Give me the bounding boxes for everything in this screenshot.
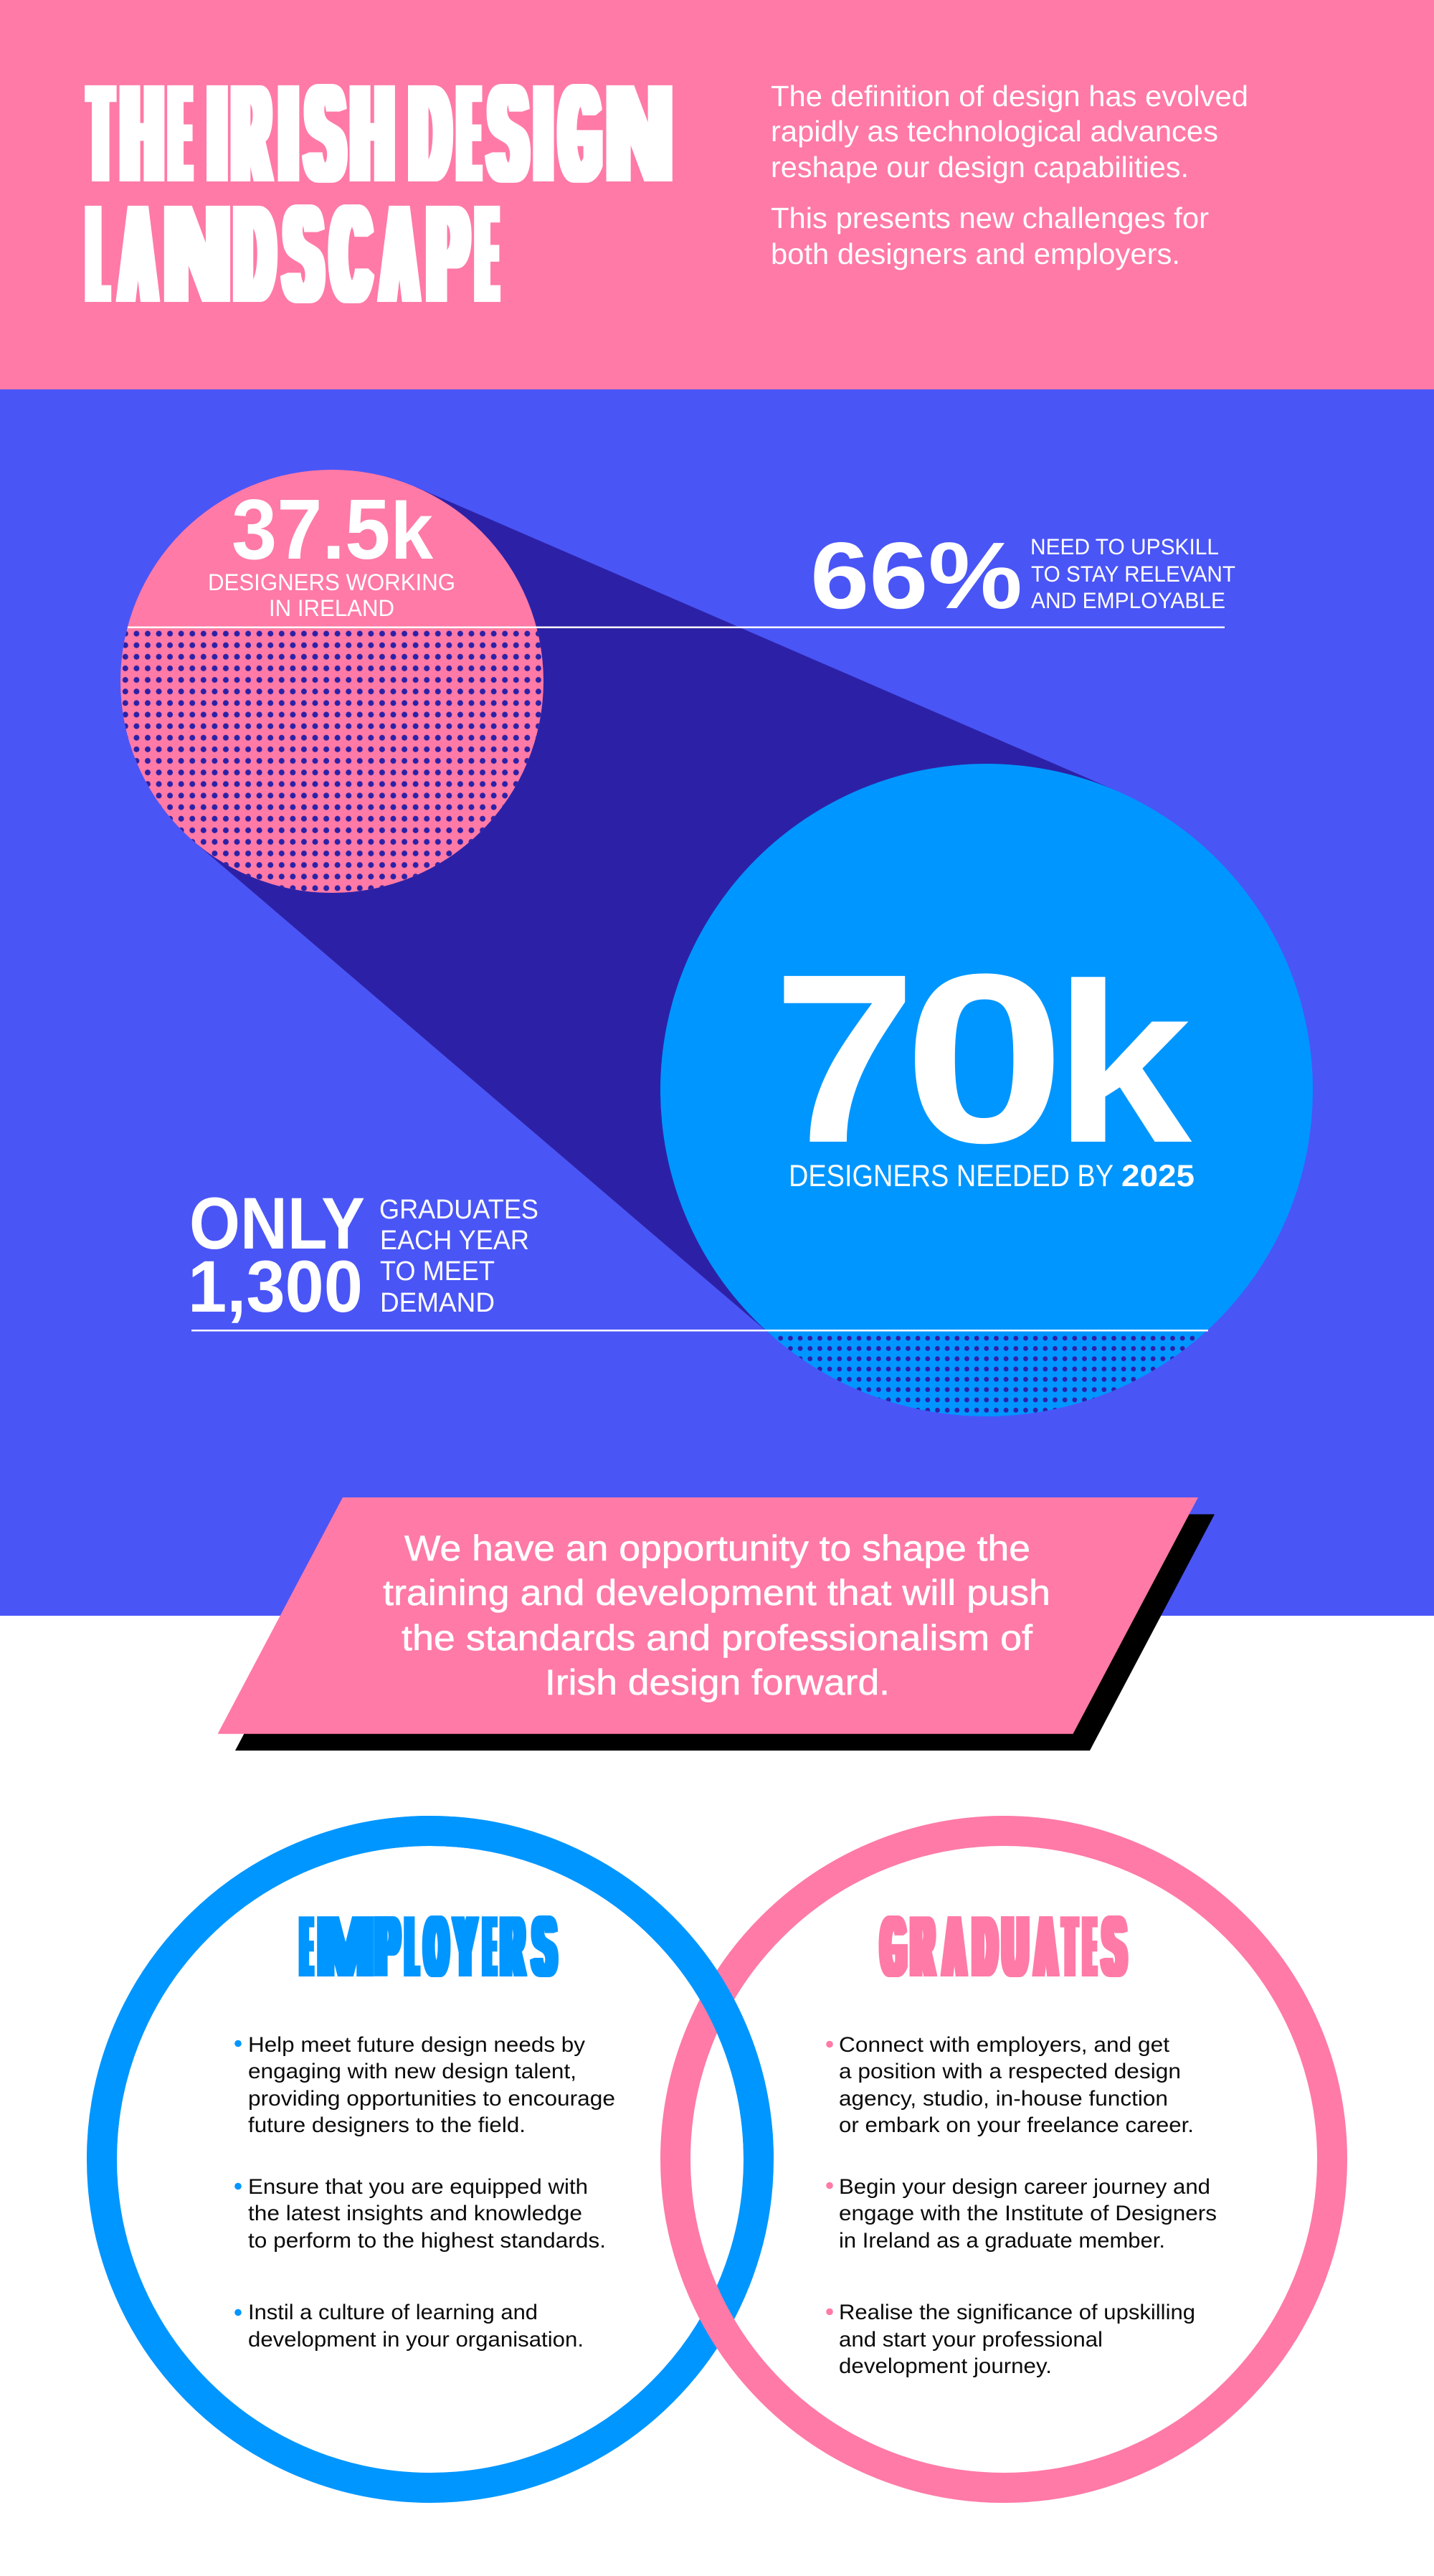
heading: employers: Y bbox=[455, 1899, 475, 1994]
headings: S bbox=[533, 1899, 556, 1994]
bullet: meet future needs bbox=[234, 2033, 615, 2137]
title: H bbox=[352, 56, 392, 210]
bullet: connect with employers: agency, studio, in-house function bbox=[839, 2087, 1168, 2111]
title: C bbox=[332, 176, 369, 331]
small circle: 37.5k designers bbox=[120, 470, 543, 894]
stat: only 1,300: ONLY bbox=[189, 1183, 365, 1264]
heading: employers: E bbox=[485, 1899, 494, 1994]
heading: graduates: G bbox=[882, 1899, 905, 1994]
stat: 70k: 2025 bbox=[1121, 1159, 1195, 1193]
heading: employers: E bbox=[302, 1899, 311, 1994]
heading: graduates: A bbox=[944, 1899, 965, 1994]
intro text: both designers and employers. bbox=[771, 237, 1180, 270]
projection shadow between circles bbox=[194, 487, 1116, 1338]
title: E bbox=[172, 56, 189, 210]
heading: graduates: A bbox=[1035, 1899, 1056, 1994]
employers list bbox=[234, 2033, 615, 2352]
stat: only 1,300 bbox=[188, 1183, 538, 1327]
banner text bbox=[383, 1528, 1050, 1703]
bullet: upskilling: and start your professional bbox=[839, 2328, 1103, 2352]
stat: 70k: 7 bbox=[773, 924, 916, 1193]
intro text: rapidly as technological advances bbox=[771, 115, 1218, 148]
blue statistics panel bbox=[0, 389, 1434, 1616]
heading: employers: O bbox=[425, 1899, 447, 1994]
title: N bbox=[607, 56, 672, 210]
big circle: 70k designers bbox=[660, 764, 1313, 1417]
bullet: stay equipped bbox=[234, 2175, 606, 2253]
title: P bbox=[429, 176, 467, 331]
line under 1,300 stat bbox=[191, 1330, 1208, 1331]
stat: 37.5k: IN IRELAND bbox=[269, 595, 394, 621]
bullet: begin career journey: Begin your design career journey and bbox=[839, 2175, 1210, 2199]
line under 66% stat bbox=[128, 627, 1225, 628]
heading: graduates: E bbox=[1086, 1899, 1094, 1994]
bullet: begin career journey bbox=[826, 2175, 1217, 2253]
bullet: meet future needs: future designers to the field. bbox=[248, 2113, 526, 2137]
header band bbox=[0, 0, 1434, 389]
bullet: connect with employers bbox=[826, 2033, 1194, 2137]
title: S bbox=[490, 56, 526, 210]
stat: only 1,300: 1,300 bbox=[188, 1246, 363, 1327]
bullet: connect with employers: a position with a respected design bbox=[839, 2060, 1181, 2083]
bullet: stay equipped: the latest insights and knowledge bbox=[248, 2202, 582, 2225]
intro text: The definition of design has evolved bbox=[771, 80, 1248, 113]
title: R bbox=[234, 56, 269, 210]
bullet: upskilling: development journey. bbox=[839, 2354, 1052, 2378]
bullet: meet future needs: providing opportunities to encourage bbox=[248, 2087, 615, 2111]
title: S bbox=[285, 176, 321, 331]
stat: only 1,300: TO MEET bbox=[380, 1256, 495, 1287]
heading: graduates: R bbox=[912, 1899, 934, 1994]
stat: 37.5k: DESIGNERS WORKING bbox=[208, 569, 455, 595]
bullet: upskilling bbox=[826, 2301, 1195, 2378]
banner text: the standards and professionalism of bbox=[402, 1618, 1032, 1658]
stat: 66%: TO STAY RELEVANT bbox=[1031, 561, 1235, 587]
title: G bbox=[561, 56, 599, 210]
title: T bbox=[91, 56, 110, 210]
stat: 70k bbox=[773, 924, 1195, 1193]
ring: graduates bbox=[675, 1831, 1332, 2488]
bullet: culture of learning: Instil a culture of learning and bbox=[248, 2301, 538, 2324]
title: D bbox=[236, 176, 273, 331]
title: E bbox=[479, 176, 495, 331]
title: I bbox=[280, 56, 297, 210]
title: N bbox=[164, 176, 230, 331]
title bbox=[90, 56, 672, 331]
title: A bbox=[382, 176, 417, 331]
heading: employers: L bbox=[407, 1899, 417, 1994]
heading: employers: R bbox=[502, 1899, 523, 1994]
heading: employers: P bbox=[376, 1899, 399, 1994]
intro text: This presents new challenges for bbox=[771, 202, 1209, 235]
stat: only 1,300: EACH YEAR bbox=[380, 1226, 529, 1256]
stat: 70k: k bbox=[1054, 937, 1193, 1190]
stat: 37.5k: 37.5k bbox=[232, 482, 434, 577]
banner bbox=[218, 1497, 1215, 1751]
stat: 66%: AND EMPLOYABLE bbox=[1031, 587, 1225, 613]
bullet: meet future needs: engaging with new design talent, bbox=[248, 2060, 576, 2083]
text: S bbox=[1103, 1899, 1126, 1994]
bullet: stay equipped: to perform to the highest standards. bbox=[248, 2229, 606, 2253]
bullet: upskilling: Realise the significance of upskilling bbox=[839, 2301, 1195, 2324]
stat: 37.5k bbox=[208, 482, 455, 621]
title: H bbox=[122, 56, 162, 210]
title: E bbox=[460, 56, 478, 210]
heading: employers: M bbox=[317, 1899, 374, 1994]
title: S bbox=[307, 56, 343, 210]
stat: 70k: 0 bbox=[903, 924, 1065, 1193]
bullet: connect with employers: Connect with employers, and get bbox=[839, 2033, 1170, 2057]
intro text bbox=[771, 80, 1248, 270]
intro text: reshape our design capabilities. bbox=[771, 151, 1189, 184]
heading: graduates: D bbox=[974, 1899, 997, 1994]
stat: 66% bbox=[810, 523, 1235, 628]
bullet: begin career journey: engage with the Institute of Designers bbox=[839, 2202, 1217, 2225]
stat: 66%: 66% bbox=[810, 523, 1022, 628]
bullet: connect with employers: or embark on your freelance career. bbox=[839, 2113, 1194, 2137]
banner text: training and development that will push bbox=[383, 1573, 1050, 1613]
banner text: We have an opportunity to shape the bbox=[404, 1528, 1030, 1568]
stat: 66%: NEED TO UPSKILL bbox=[1030, 534, 1219, 559]
banner shape bbox=[218, 1497, 1198, 1734]
bullet: stay equipped: Ensure that you are equipped with bbox=[248, 2175, 588, 2199]
stat: only 1,300: GRADUATES bbox=[379, 1195, 538, 1225]
bullet: culture of learning bbox=[234, 2301, 584, 2352]
graduates list bbox=[826, 2033, 1217, 2378]
title: L bbox=[90, 176, 105, 331]
bullet: culture of learning: development in your organisation. bbox=[248, 2328, 584, 2352]
title: D bbox=[411, 56, 449, 210]
bullet: meet future needs: Help meet future design needs by bbox=[248, 2033, 585, 2057]
ring: employers bbox=[102, 1831, 759, 2488]
title: A bbox=[121, 176, 155, 331]
banner text: Irish design forward. bbox=[545, 1662, 890, 1703]
heading: graduates: U bbox=[1003, 1899, 1027, 1994]
bullet: begin career journey: in Ireland as a graduate member. bbox=[839, 2229, 1165, 2253]
banner shadow bbox=[235, 1515, 1215, 1751]
stat: 70k: DESIGNERS NEEDED BY bbox=[789, 1159, 1114, 1193]
title: I bbox=[209, 56, 225, 210]
headings bbox=[302, 1899, 1126, 1994]
heading: graduates: T bbox=[1064, 1899, 1076, 1994]
stat: only 1,300: DEMAND bbox=[380, 1288, 495, 1318]
title: I bbox=[536, 56, 551, 210]
